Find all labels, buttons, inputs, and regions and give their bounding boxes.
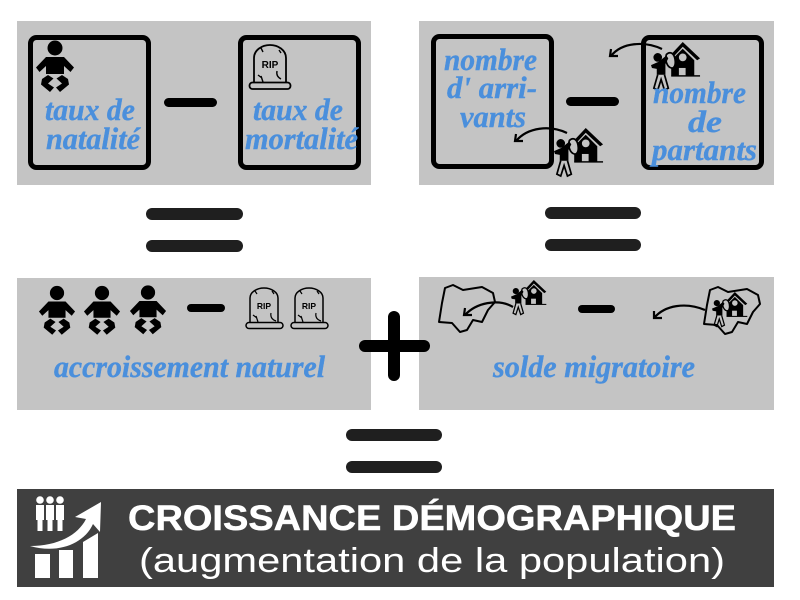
label: nombre d'arrivants xyxy=(444,42,537,134)
label: taux de natalité: natalité xyxy=(46,121,141,156)
label: taux de mortalité xyxy=(245,92,359,156)
icon: person leaving house xyxy=(651,42,700,90)
minus sign xyxy=(578,305,615,313)
panel: accroissement naturel xyxy=(17,278,371,410)
label: taux de natalité: taux de xyxy=(45,92,135,127)
label: taux de mortalité: taux de xyxy=(253,92,343,127)
icon: map with arrival xyxy=(439,280,546,332)
icon: baby xyxy=(36,40,74,92)
label: nombre d'arrivants: d' arri- xyxy=(447,70,537,105)
icon: gravestones xyxy=(246,288,328,328)
panel: solde migratoire xyxy=(419,277,774,410)
equals sign: right xyxy=(545,207,641,251)
icon: gravestones: RIP xyxy=(302,301,316,311)
label: accroissement naturel: accroissement naturel xyxy=(54,349,325,384)
equals sign: left xyxy=(146,208,243,252)
heading: CROISSANCE DÉMOGRAPHIQUE xyxy=(128,498,736,538)
minus sign xyxy=(164,98,217,107)
label: taux de natalité xyxy=(45,92,141,156)
banner: population growth xyxy=(17,489,774,587)
arrow: arrivals xyxy=(515,128,567,141)
icon: gravestone: RIP xyxy=(262,60,279,71)
icon: map with departure xyxy=(654,287,760,334)
box: arrivals xyxy=(434,36,603,176)
icon: people and rising chart xyxy=(30,496,101,578)
icon: babies xyxy=(39,285,166,335)
arrow: departures xyxy=(610,44,662,56)
box: death rate xyxy=(240,38,359,168)
label: nombre de partants xyxy=(649,75,757,167)
plus sign xyxy=(359,311,430,381)
panel: natural balance formula xyxy=(17,21,371,185)
icon: gravestones: RIP xyxy=(257,301,271,311)
box: departures xyxy=(610,38,762,168)
minus sign xyxy=(566,97,619,106)
panel: migration formula xyxy=(419,21,774,185)
label: nombre d'arrivants: nombre xyxy=(444,42,537,77)
icon: person leaving house xyxy=(554,128,603,176)
label: nombre de partants: nombre xyxy=(653,75,746,110)
label: nombre d'arrivants: vants xyxy=(460,99,526,134)
box: birth rate xyxy=(30,38,148,168)
label: solde migratoire: solde migratoire xyxy=(492,349,695,384)
label: nombre de partants: de xyxy=(688,104,722,139)
subheading: (augmentation de la population) xyxy=(139,542,725,580)
minus sign xyxy=(187,304,225,312)
label: taux de mortalité: mortalité xyxy=(245,121,359,156)
equals sign: bottom xyxy=(346,429,442,473)
label: nombre de partants: partants xyxy=(649,132,757,167)
